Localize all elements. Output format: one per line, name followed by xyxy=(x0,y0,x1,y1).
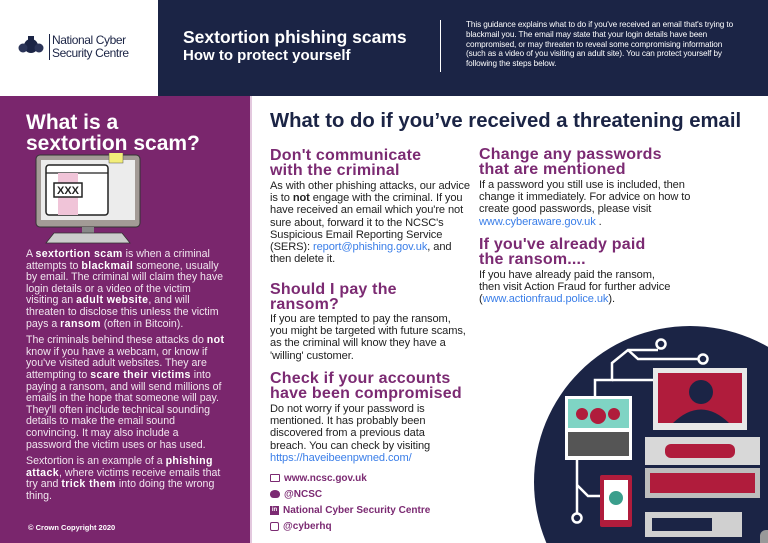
section: should I pay xyxy=(270,281,466,362)
section: don't communicate: Don't communicate xyxy=(270,147,421,164)
section: check accounts xyxy=(270,370,462,464)
icon: computer: XXX xyxy=(57,185,80,197)
section: already paid: If you've already paid xyxy=(479,236,646,253)
panel: what is a sextortion scam xyxy=(0,96,250,543)
text block: A sextortion scam is when a criminal attempts to blackmail someone, usually by email. The criminal will claim they have login details or a video of the victim visiting an adult website, and will threaten to disclose this unless the victim pays a ransom (often in Bitcoin). xyxy=(26,248,223,330)
contacts xyxy=(270,472,430,532)
section: already paid: (www.actionfraud.police.uk). xyxy=(479,293,615,305)
contacts: @cyberhq xyxy=(283,520,332,532)
section: should I pay: ransom? xyxy=(270,296,339,313)
heading: sextortion scam? xyxy=(26,132,200,155)
text block: The criminals behind these attacks do not know if you have a webcam, or know if you've visited adult websites. They are attempting to scare their victims into paying a ransom, and will send millions of emails in the hope that someone will pay. They'll often include technical sounding details to make the email sound convincing. It may also include a password the victim uses or has used. xyxy=(26,334,224,450)
section: should I pay: Should I pay the xyxy=(270,281,397,298)
title: Sextortion phishing scams xyxy=(183,27,407,47)
section: change passwords: Change any passwords xyxy=(479,146,662,163)
title xyxy=(183,27,407,64)
header bar xyxy=(0,0,768,96)
text block: Sextortion is an example of a phishing attack, where victims receive emails that try and trick them into doing the wrong thing. xyxy=(26,455,220,502)
section: already paid: the ransom.... xyxy=(479,251,586,268)
icon: computer xyxy=(36,153,140,244)
section: don't communicate: As with other phishing attacks, our advice is to not engage with the criminal. If you have received an email which you're not sure about, forward it to the NCSC's Suspicious Email Reporting Service (SERS): report@phishing.gov.uk, and then delete it. xyxy=(270,180,470,265)
section: already paid: then visit Action Fraud for further advice xyxy=(479,281,670,293)
intro text: This guidance explains what to do if you've received an email that's trying to blackmail you. The email may state that your login details have been compromised, or may threaten to reveal some compromising information (such as a video of you visiting an adult site). You can protect yourself by following the steps below. xyxy=(466,20,733,68)
logo block xyxy=(0,0,158,96)
contacts: in xyxy=(272,506,277,512)
contacts: @NCSC xyxy=(284,488,322,500)
section: already paid xyxy=(479,236,670,305)
logo text xyxy=(49,34,129,60)
divider line xyxy=(440,20,441,72)
section: check accounts: have been compromised xyxy=(270,385,462,402)
section: should I pay: If you are tempted to pay the ransom, you might be targeted with future scams, as the criminal will know they have a 'willing' customer. xyxy=(270,313,466,362)
section: change passwords: that are mentioned xyxy=(479,161,626,178)
heading xyxy=(26,111,200,155)
section: change passwords: If a password you still use is included, then change it immediately. For advice on how to create good passwords, please visit www.cyberaware.gov.uk . xyxy=(479,179,690,228)
section: already paid: If you have already paid the ransom, xyxy=(479,269,655,281)
contacts: National Cyber Security Centre xyxy=(283,504,430,516)
copyright: © Crown Copyright 2020 xyxy=(28,523,115,532)
section: check accounts: Do not worry if your password is mentioned. It has probably been discovered from a previous data breach. You can check by visiting https://haveibeenpwned.com/ xyxy=(270,403,430,464)
title: How to protect yourself xyxy=(183,47,351,64)
section: don't communicate: with the criminal xyxy=(270,162,400,179)
main heading: What to do if you’ve received a threatening email xyxy=(270,110,741,132)
section: change passwords xyxy=(479,146,690,228)
illustration: cyber criminal xyxy=(534,326,768,543)
logo text: Security Centre xyxy=(52,46,129,60)
section: check accounts: Check if your accounts xyxy=(270,370,450,387)
text block xyxy=(26,248,224,502)
icon: crest xyxy=(18,36,44,53)
heading: What is a xyxy=(26,111,118,134)
logo text: National Cyber xyxy=(52,33,126,47)
contacts: www.ncsc.gov.uk xyxy=(284,472,367,484)
